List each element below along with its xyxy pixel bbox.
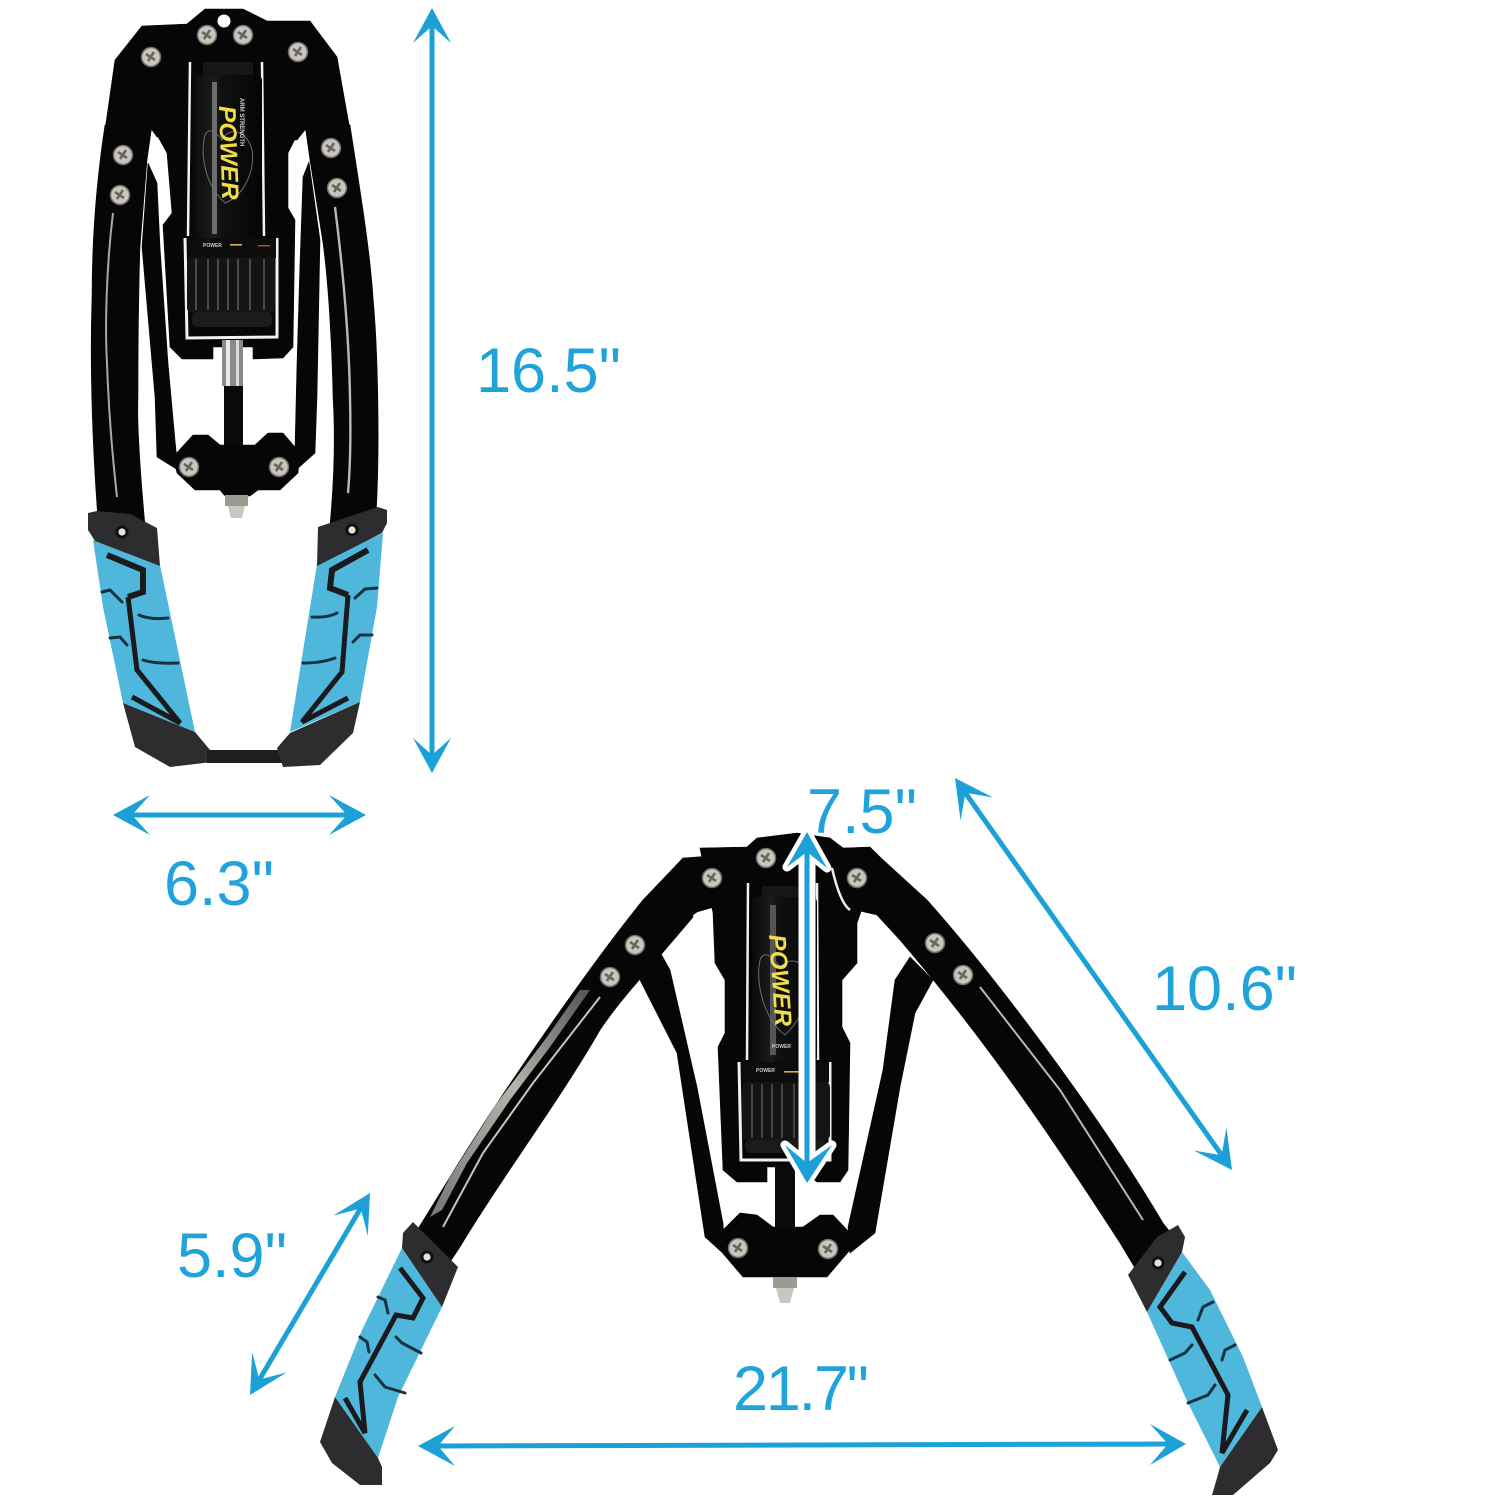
groove highlights	[443, 997, 600, 1227]
arrow: grip 5.9	[250, 1193, 370, 1395]
bolt nut	[773, 1277, 797, 1303]
cylinder	[752, 897, 817, 1062]
arrow: height 16.5	[413, 8, 451, 773]
left strut	[142, 163, 178, 470]
arrow: width 6.3	[113, 795, 366, 835]
bottom plate	[720, 1213, 850, 1277]
center rod	[222, 340, 243, 386]
bracket slots	[747, 883, 818, 1060]
screws	[110, 26, 346, 476]
heart line art	[759, 955, 809, 1035]
head outline	[832, 868, 850, 910]
left grip	[88, 511, 212, 767]
left arm	[91, 125, 152, 525]
knob	[742, 1082, 830, 1140]
top head	[700, 833, 880, 923]
knob ring	[741, 1062, 829, 1082]
left arm highlight band	[430, 990, 590, 1217]
heart line art	[203, 131, 253, 203]
small cylinder text: POWER	[772, 1044, 791, 1050]
center rod	[775, 1165, 795, 1229]
cylinder highlight	[770, 905, 776, 1055]
arrow: arm 10.6	[955, 778, 1232, 1170]
power logo: POWER	[213, 105, 243, 201]
right grip	[1128, 1225, 1278, 1495]
left grip	[320, 1222, 458, 1485]
center plate	[713, 913, 857, 1182]
label: 6.3: 6.3"	[164, 849, 274, 919]
product: opened arm exerciser: POWER	[756, 1068, 775, 1074]
right strut	[848, 957, 933, 1253]
arrow: span 21.7	[418, 1424, 1186, 1466]
groove highlights	[106, 213, 117, 497]
label: 10.6: 10.6"	[1152, 954, 1297, 1024]
top head plate	[105, 9, 350, 140]
arrow: cylinder 7.5	[785, 832, 832, 1183]
cylinder mount plate	[157, 135, 297, 359]
right arm	[305, 125, 378, 525]
left arm head	[665, 855, 737, 935]
product: closed arm exerciser: POWER	[203, 243, 222, 249]
right strut	[295, 162, 320, 470]
bottom plate	[173, 433, 300, 496]
product: closed arm exerciser	[88, 9, 387, 767]
knob	[187, 257, 275, 313]
label: 16.5: 16.5"	[476, 336, 621, 406]
bolt nut	[225, 495, 248, 518]
cylinder	[193, 75, 262, 238]
cylinder neck	[762, 886, 812, 898]
handle cross bar	[207, 750, 282, 763]
screws	[600, 848, 972, 1258]
mounting hole	[218, 14, 230, 28]
left arm	[408, 858, 693, 1262]
knob ring	[188, 238, 276, 258]
label: 7.5: 7.5"	[807, 777, 917, 847]
label: 21.7: 21.7"	[733, 1354, 869, 1424]
cylinder neck	[203, 62, 253, 76]
left strut	[640, 952, 725, 1255]
right grip	[277, 507, 387, 767]
power logo: POWER	[763, 934, 796, 1028]
bracket slots	[188, 62, 264, 236]
label: 5.9: 5.9"	[177, 1221, 287, 1291]
small cylinder text: ARM STRENGTH	[238, 98, 244, 146]
right arm	[835, 857, 1178, 1268]
cylinder highlight	[212, 82, 217, 234]
product: opened arm exerciser	[320, 833, 1278, 1495]
